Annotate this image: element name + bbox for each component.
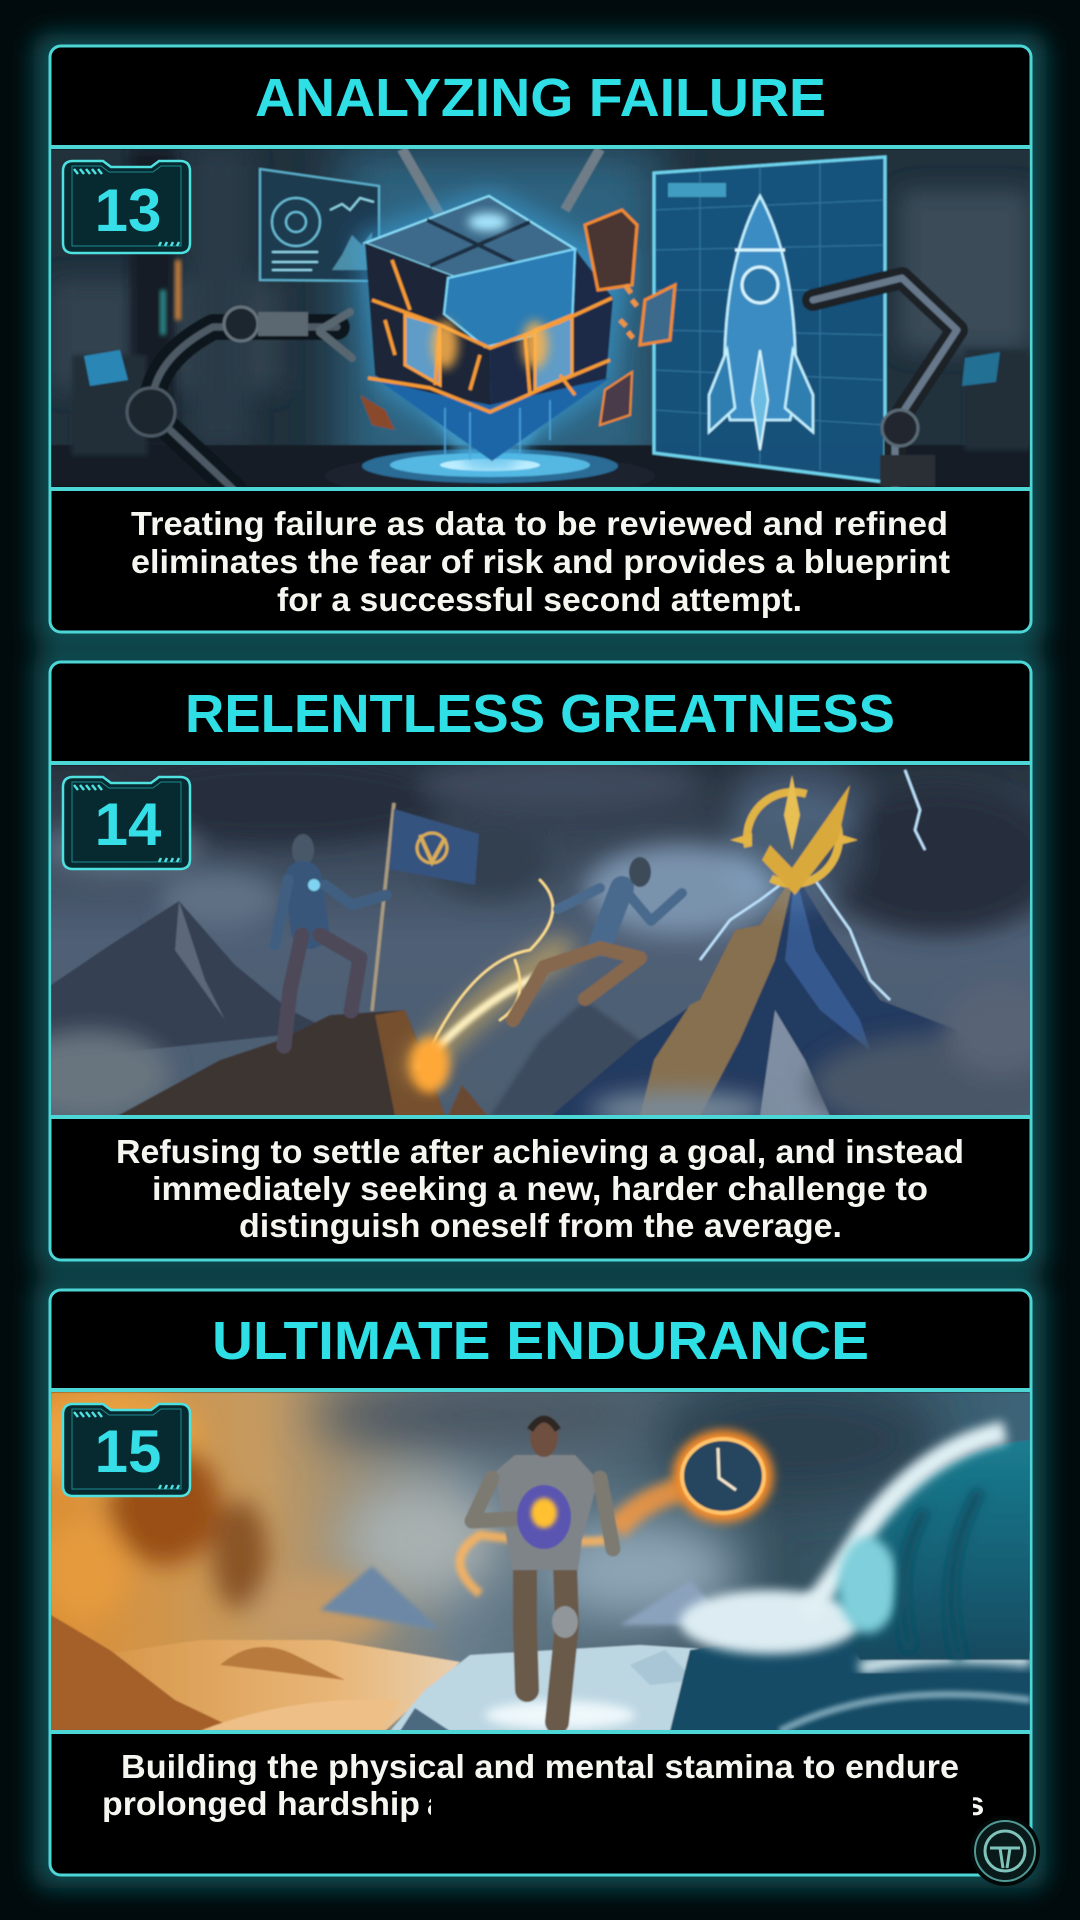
description: relentless greatness [116,1133,964,1244]
lightning [700,770,925,1000]
running figure [513,857,682,1020]
description: analyzing failure [131,505,950,618]
description: analyzing failure: eliminates the fear of risk and provides a blueprint [131,543,950,580]
description: ultimate endurance: Building the physical and mental stamina to endure [121,1748,959,1785]
rocket blueprint [654,157,885,482]
floating fragments [360,210,675,430]
summit rock [117,1010,488,1116]
rocket drawing [709,196,813,450]
energy trail [410,880,560,1093]
sandstorm [20,1395,390,1645]
fractured cube [355,190,675,465]
description: relentless greatness: distinguish oneself from the average. [239,1207,842,1244]
number badge 14 [63,777,190,869]
description: ultimate endurance [102,1748,984,1825]
heading: ultimate endurance: ULTIMATE ENDURANCE [212,1311,869,1371]
giant wave [680,1432,1030,1660]
number badge 15 [63,1404,190,1496]
right robot arm [813,278,957,490]
sea [670,1636,1030,1730]
panel: analyzing failure [50,46,1031,632]
divider lines [50,147,1031,489]
flag and pole [372,803,479,1011]
snowy mountains [320,1566,730,1630]
low clouds [51,982,1030,1115]
desert dunes [51,1615,460,1731]
description: relentless greatness: Refusing to settle after achieving a goal, and instead [116,1133,964,1170]
number badge 13 [63,161,190,253]
number badge 15: 15 [95,1418,161,1485]
description: relentless greatness: immediately seeking a new, harder challenge to [152,1170,928,1207]
central peak [552,887,953,1115]
divider lines [50,763,1031,1117]
number badge 13: 13 [95,177,161,244]
description: ultimate endurance: prolonged hardship [102,1785,420,1822]
figure holding the flag [275,834,386,1046]
icy shore [390,1644,699,1730]
illustration: runner between sandstorm and wave [20,1380,1030,1731]
panel: relentless greatness [10,662,1070,1260]
console screens [72,350,1030,455]
icon: corner logo badge [970,1816,1040,1886]
hud screen [260,169,379,281]
description: ultimate endurance: a [427,1785,446,1822]
storm clouds [40,755,1060,935]
description: analyzing failure: for a successful second attempt. [277,581,802,618]
storm sky [310,1380,940,1620]
distant mountains [51,901,700,1116]
divider lines [50,1390,1031,1732]
hologram platform [360,448,628,487]
armoured runner [472,1417,613,1722]
number badge 14: 14 [95,791,162,858]
heading: relentless greatness: RELENTLESS GREATNESS [185,684,895,744]
heading: analyzing failure: ANALYZING FAILURE [255,68,826,128]
burning clock [460,1430,773,1594]
description: analyzing failure: Treating failure as data to be reviewed and refined [131,505,948,542]
panel: ultimate endurance [20,1290,1031,1875]
illustration: mountain climbers in a storm [51,765,1030,1115]
illustration: failure cube and rocket blueprint [51,149,1030,498]
upper tool arms [402,149,600,215]
description: ultimate endurance: s [966,1785,984,1822]
victory emblem [725,775,865,912]
left robot arm [127,307,352,490]
